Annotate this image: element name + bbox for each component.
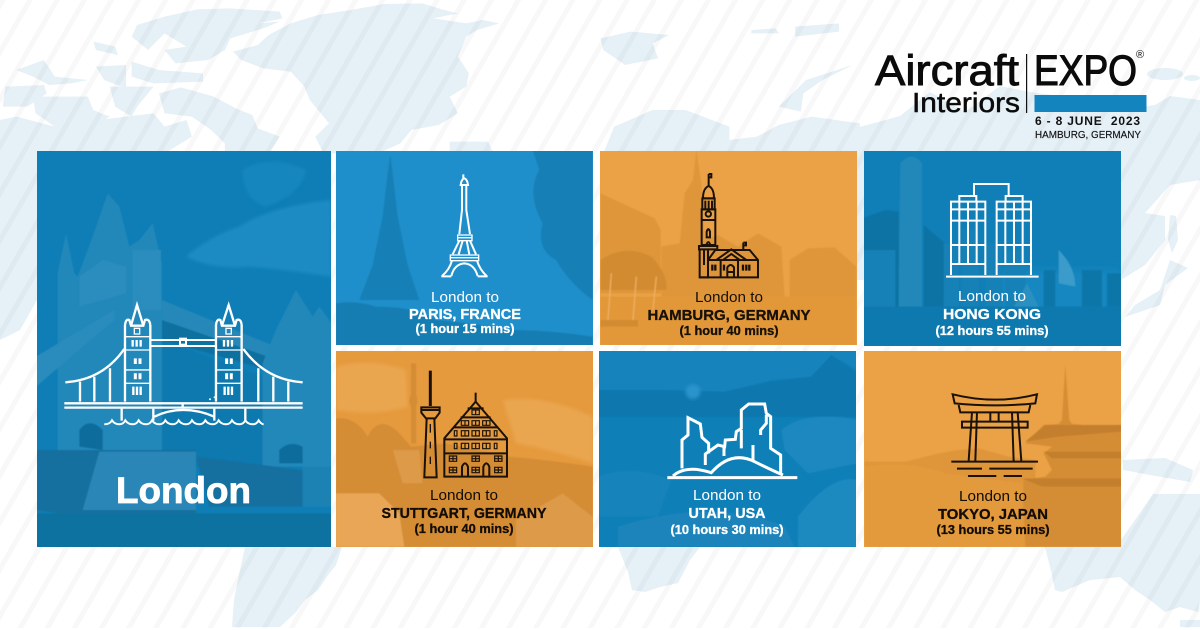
label: Stuttgart route (382, 488, 546, 536)
label: Tokyo route (936, 489, 1050, 537)
label: Tokyo route: TOKYO, JAPAN (938, 506, 1048, 523)
panel: Paris (336, 150, 593, 347)
icon: Tower Bridge (64, 305, 303, 424)
icon: Stuttgart TV tower and house (421, 371, 507, 477)
label: Stuttgart route: London to (430, 488, 498, 504)
logo: Aircraft Interiors EXPO: EXPO (1034, 48, 1137, 95)
label: Paris route (409, 290, 521, 336)
label: Tokyo route: London to (959, 489, 1027, 505)
label: Hamburg route (648, 290, 810, 338)
label: Hong Kong route: London to (958, 289, 1026, 305)
label: Hamburg route: London to (695, 290, 763, 306)
icon: Hong Kong towers (946, 184, 1039, 277)
logo: Aircraft Interiors EXPO: Interiors (912, 87, 1020, 118)
panel: London (36, 151, 332, 550)
label: Tokyo route: (13 hours 55 mins) (936, 523, 1050, 537)
logo: Aircraft Interiors EXPO: Aircraft (875, 48, 1019, 95)
icon: torii gate (951, 394, 1038, 476)
photo: Hong Kong skyline (862, 157, 1122, 347)
panel: Tokyo (864, 351, 1122, 547)
logo: Aircraft Interiors EXPO: HAMBURG, GERMANY (1035, 130, 1141, 141)
panel: Stuttgart (336, 351, 593, 547)
label: Paris route: London to (431, 290, 499, 306)
label: Utah route: (10 hours 30 mins) (670, 523, 784, 537)
icon: Utah rock formation (667, 404, 797, 478)
label: Hong Kong route (936, 289, 1048, 338)
icon: Eiffel Tower (441, 174, 488, 276)
label: London: London (116, 470, 251, 511)
panel: Hamburg (600, 150, 857, 345)
label: Stuttgart route: STUTTGART, GERMANY (382, 505, 546, 522)
label: Hamburg route: HAMBURG, GERMANY (648, 307, 810, 324)
photo: clouds and Tower Bridge (36, 162, 332, 550)
photo: Eiffel Tower and trees (336, 150, 593, 347)
icon: Hamburg church (699, 174, 758, 277)
photo: Tokyo pagoda and Mount Fuji (865, 365, 1122, 547)
label: Paris route: (1 hour 15 mins) (416, 322, 514, 336)
panel: Utah (598, 350, 858, 547)
label: Stuttgart route: (1 hour 40 mins) (414, 522, 514, 536)
logo: Aircraft Interiors EXPO: 6 - 8 JUNE 2023 (1035, 114, 1140, 128)
photo: Stuttgart hills and clouds (336, 362, 593, 547)
photo: Utah canyon landscape (598, 350, 858, 547)
label: Utah route: UTAH, USA (688, 505, 766, 522)
label: Hong Kong route: (12 hours 55 mins) (936, 324, 1048, 338)
logo: Aircraft Interiors EXPO: ® (1136, 49, 1144, 61)
label: Paris route: PARIS, FRANCE (409, 306, 521, 323)
photo: Hamburg waterfront (601, 150, 856, 345)
panel: Hong Kong (862, 151, 1122, 347)
logo: Aircraft Interiors EXPO (875, 48, 1146, 141)
label: Hamburg route: (1 hour 40 mins) (680, 324, 778, 338)
label: Utah route (670, 488, 784, 537)
label: Utah route: London to (693, 488, 761, 504)
label: Hong Kong route: HONG KONG (943, 306, 1041, 323)
